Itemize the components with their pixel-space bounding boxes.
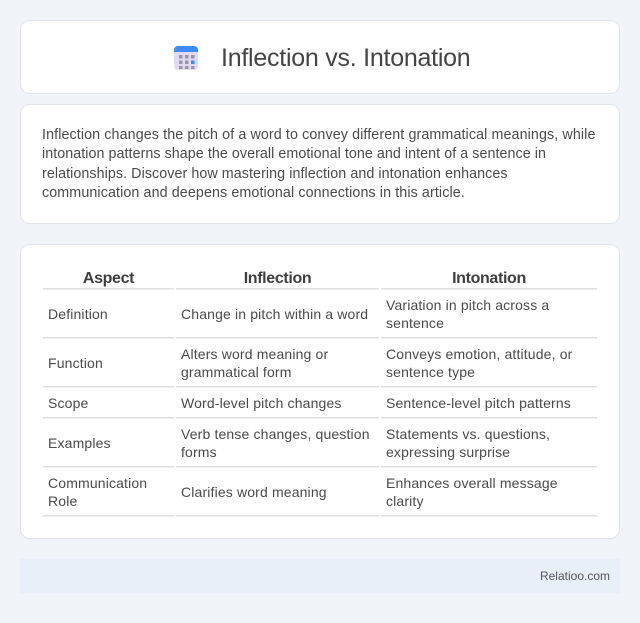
intro text: relationships. Discover how mastering inflection and intonation enhances <box>42 166 508 182</box>
row: definition: Change in pitch within a word <box>181 306 368 322</box>
row: examples: expressing surprise <box>386 444 510 460</box>
table header: Inflection <box>244 270 311 287</box>
row: scope: Sentence-level pitch patterns <box>386 395 571 411</box>
row: scope: Scope <box>48 395 88 411</box>
row: scope <box>48 395 571 411</box>
row: definition: sentence <box>386 315 444 331</box>
title card <box>20 20 620 94</box>
intro card <box>20 104 620 224</box>
row: communication role: clarity <box>386 493 424 509</box>
row: communication role: Clarifies word meaning <box>181 484 327 500</box>
table header <box>83 270 526 287</box>
row: communication role: Role <box>48 493 77 509</box>
title: Inflection vs. Intonation <box>221 44 470 72</box>
footer credit: Relatioo.com <box>540 569 610 583</box>
icon: calendar <box>174 46 198 70</box>
row: definition: Definition <box>48 306 108 322</box>
row: communication role: Enhances overall message <box>386 475 558 491</box>
row: function: Function <box>48 355 103 371</box>
row: function: Alters word meaning or <box>181 346 328 362</box>
row: function <box>48 346 572 380</box>
table card <box>20 244 620 539</box>
row: scope: Word-level pitch changes <box>181 395 342 411</box>
row: examples: Verb tense changes, question <box>181 426 370 442</box>
intro text: Inflection changes the pitch of a word to convey different grammatical meanings, while <box>42 127 596 143</box>
row: examples <box>48 426 550 460</box>
row: function: grammatical form <box>181 364 292 380</box>
row: communication role: Communication <box>48 475 147 491</box>
row: examples: forms <box>181 444 217 460</box>
row: function: sentence type <box>386 364 475 380</box>
intro text: intonation patterns shape the overall emotional tone and intent of a sentence in <box>42 146 546 162</box>
row: definition: Variation in pitch across a <box>386 297 549 313</box>
table header: Intonation <box>452 270 526 287</box>
intro text: communication and deepens emotional connections in this article. <box>42 185 465 201</box>
row: communication role <box>48 475 558 509</box>
table header: Aspect <box>83 270 134 287</box>
row: examples: Statements vs. questions, <box>386 426 550 442</box>
row: function: Conveys emotion, attitude, or <box>386 346 572 362</box>
comparison table <box>43 270 597 517</box>
row: examples: Examples <box>48 435 111 451</box>
row: definition <box>48 297 550 331</box>
footer bar <box>20 559 620 593</box>
intro text <box>42 127 596 201</box>
